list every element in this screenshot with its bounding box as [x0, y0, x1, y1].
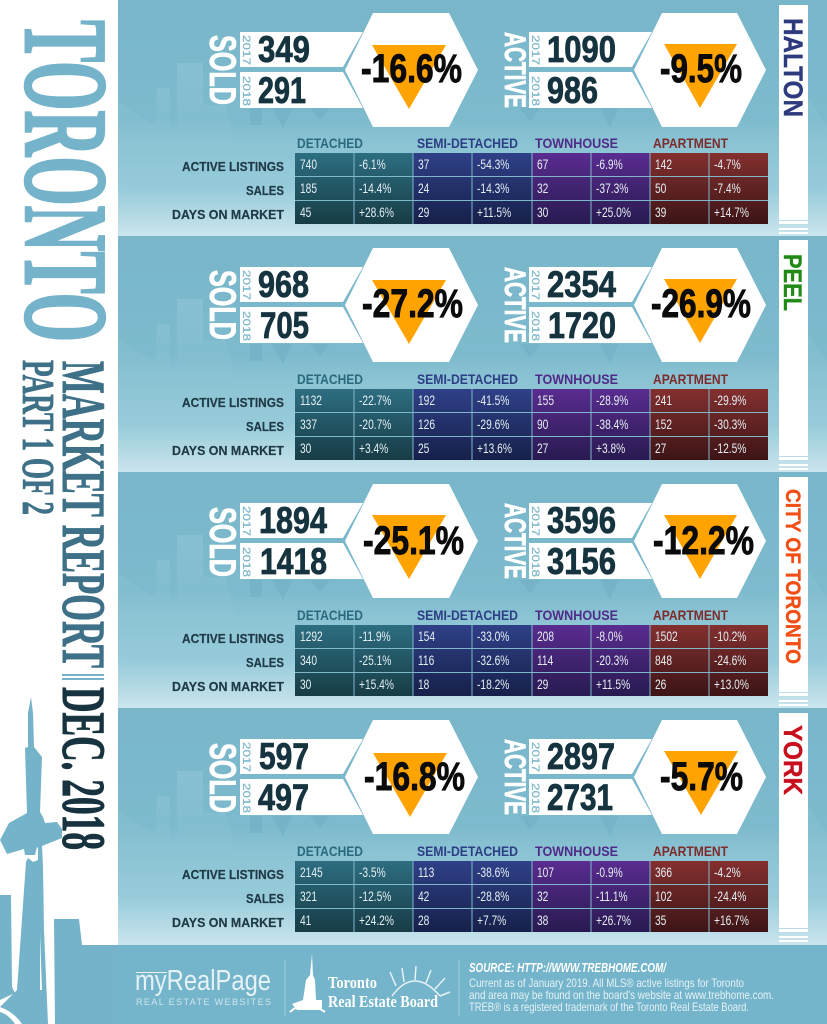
data table: +16.7%: [714, 912, 749, 928]
data table: -18.2%: [477, 676, 509, 692]
table headers: TOWNHOUSE: [535, 135, 618, 151]
data table: [295, 625, 768, 696]
data table: -29.9%: [714, 392, 746, 408]
table headers: [297, 135, 728, 151]
sold years: 2017: [240, 270, 252, 300]
data table: 152: [655, 416, 672, 432]
data table: -7.4%: [714, 180, 741, 196]
row labels: ACTIVE LISTINGS: [182, 159, 284, 174]
data table: +28.6%: [359, 204, 394, 220]
table headers: DETACHED: [297, 607, 363, 623]
data table: -0.9%: [596, 864, 623, 880]
data table: -4.2%: [714, 864, 741, 880]
data table: +24.2%: [359, 912, 394, 928]
data table: 28: [418, 912, 430, 928]
data table: 32: [537, 888, 549, 904]
table headers: DETACHED: [297, 135, 363, 151]
data table: +11.5%: [596, 676, 630, 692]
table headers: TOWNHOUSE: [535, 607, 618, 623]
data table: -37.3%: [596, 180, 628, 196]
active numbers: [547, 736, 615, 818]
skyline with CN Tower: [0, 697, 118, 1024]
region name: HALTON: [778, 18, 808, 117]
data table: -6.9%: [596, 156, 623, 172]
data table: +25.0%: [596, 204, 631, 220]
active years: 2018: [529, 311, 541, 341]
active numbers: [547, 29, 616, 111]
region tab: [779, 477, 808, 706]
table headers: TOWNHOUSE: [535, 843, 618, 859]
active bars: [529, 267, 652, 343]
data table: +14.7%: [714, 204, 749, 220]
sold years: [240, 742, 252, 813]
data table: 29: [537, 676, 549, 692]
data table: -10.2%: [714, 628, 746, 644]
active years: 2018: [529, 783, 541, 813]
sold years: 2017: [240, 35, 252, 65]
data table: 26: [655, 676, 667, 692]
data table: +7.7%: [477, 912, 506, 928]
sold change: -16.8%: [364, 755, 465, 799]
active bars: [529, 32, 652, 108]
data table: +13.6%: [477, 440, 512, 456]
sold numbers: [258, 264, 309, 346]
active years: 2017: [529, 35, 541, 65]
data table: -24.4%: [714, 888, 746, 904]
data table: 366: [655, 864, 672, 880]
active hexagon: [634, 248, 766, 362]
data table: -28.9%: [596, 392, 628, 408]
sold numbers: 1418: [260, 541, 327, 582]
table headers: [297, 371, 728, 387]
data table: 340: [300, 652, 317, 668]
source text: [469, 960, 774, 1014]
active numbers: 1720: [548, 305, 616, 346]
table headers: SEMI-DETACHED: [417, 607, 518, 623]
logo: myRealPage: [135, 965, 271, 1007]
footer panel: [118, 945, 827, 1024]
data table: 208: [537, 628, 554, 644]
data table: -11.9%: [359, 628, 391, 644]
data table: -25.1%: [359, 652, 391, 668]
active numbers: [547, 264, 616, 346]
row labels: [172, 395, 284, 458]
panel: Halton: [118, 0, 827, 236]
sold numbers: 705: [260, 305, 309, 346]
logo: Toronto Real Estate Board: [290, 954, 450, 1012]
active change: -26.9%: [651, 282, 751, 326]
panel: York: [118, 708, 827, 945]
active numbers: [547, 500, 616, 582]
data table: 37: [418, 156, 430, 172]
table headers: TOWNHOUSE: [535, 371, 618, 387]
active years: [529, 742, 541, 813]
source text: Current as of January 2019. All MLS® active listings for Toronto: [469, 976, 744, 990]
table headers: APARTMENT: [653, 843, 728, 859]
data table: +3.8%: [596, 440, 625, 456]
logo: Toronto Real Estate Board: Toronto: [328, 973, 377, 992]
data table: 116: [418, 652, 434, 668]
active years: [529, 270, 541, 341]
data table: +26.7%: [596, 912, 631, 928]
down triangle: [372, 45, 446, 109]
table headers: SEMI-DETACHED: [417, 135, 518, 151]
data table: -38.4%: [596, 416, 628, 432]
region name: PEEL: [778, 254, 806, 311]
active hexagon: [634, 13, 766, 127]
table headers: DETACHED: [297, 371, 363, 387]
date: Dec. 2018: DEC. 2018: [49, 687, 116, 850]
title: Toronto: TORONTO: [0, 20, 132, 342]
data table: 30: [537, 204, 549, 220]
data table: 241: [655, 392, 672, 408]
data table: 1502: [655, 628, 678, 644]
sold hexagon: [345, 484, 478, 598]
region tab: [779, 5, 808, 234]
data table: 50: [655, 180, 667, 196]
active numbers: 3156: [547, 541, 616, 582]
sold change: -16.6%: [361, 47, 462, 91]
data table: 126: [418, 416, 435, 432]
sold numbers: 597: [259, 736, 309, 777]
data table: +3.4%: [359, 440, 388, 456]
data table: -4.7%: [714, 156, 741, 172]
active bars: [529, 739, 652, 815]
data table: -3.5%: [359, 864, 386, 880]
active years: 2018: [529, 76, 541, 106]
row labels: SALES: [246, 891, 284, 906]
sold years: 2018: [240, 311, 252, 341]
data table: -32.6%: [477, 652, 509, 668]
data table: -24.6%: [714, 652, 746, 668]
active numbers: 986: [547, 70, 598, 111]
source text: TREB® is a registered trademark of the Toronto Real Estate Board.: [469, 1000, 749, 1014]
table headers: APARTMENT: [653, 607, 728, 623]
table headers: SEMI-DETACHED: [417, 843, 518, 859]
down triangle: [664, 279, 737, 343]
data table: -33.0%: [477, 628, 509, 644]
data table: 42: [418, 888, 430, 904]
sold change: -27.2%: [362, 282, 463, 326]
data table: [295, 861, 768, 932]
sold label: SOLD: [202, 743, 243, 813]
active numbers: 2354: [547, 264, 616, 305]
sold hexagon: [345, 720, 478, 834]
data table: 740: [300, 156, 317, 172]
table headers: APARTMENT: [653, 135, 728, 151]
sold numbers: 291: [258, 70, 306, 111]
data table: -20.7%: [359, 416, 391, 432]
data table: -6.1%: [359, 156, 386, 172]
down triangle: [664, 751, 738, 815]
row labels: [172, 631, 284, 694]
data table: 154: [418, 628, 435, 644]
active label: ACTIVE: [498, 32, 531, 108]
sold bars: [240, 32, 363, 108]
row labels: [172, 159, 284, 222]
source text: SOURCE: HTTP://WWW.TREBHOME.COM/: [469, 960, 667, 975]
row labels: ACTIVE LISTINGS: [182, 395, 284, 410]
data table: 102: [655, 888, 672, 904]
active hexagon: [634, 720, 766, 834]
data table: 113: [418, 864, 434, 880]
data table: 29: [418, 204, 430, 220]
down triangle: [664, 44, 737, 108]
data table: 27: [537, 440, 549, 456]
sold numbers: 1894: [259, 500, 327, 541]
data table: 185: [300, 180, 317, 196]
row labels: SALES: [246, 655, 284, 670]
title separator: [62, 674, 104, 680]
down triangle: [372, 515, 446, 579]
data table: 192: [418, 392, 435, 408]
down triangle: [372, 280, 446, 344]
region tab: [779, 240, 808, 470]
data table: 155: [537, 392, 554, 408]
data table: -28.8%: [477, 888, 509, 904]
table headers: [297, 843, 728, 859]
logo: Toronto Real Estate Board: Real Estate Board: [328, 992, 438, 1011]
active years: 2018: [529, 547, 541, 577]
data table: -12.5%: [714, 440, 746, 456]
sold label: SOLD: [202, 507, 243, 577]
active years: 2017: [529, 270, 541, 300]
table headers: DETACHED: [297, 843, 363, 859]
active years: 2017: [529, 506, 541, 536]
active years: [529, 35, 541, 106]
data table: -22.7%: [359, 392, 391, 408]
row labels: [172, 867, 284, 930]
data table: 27: [655, 440, 667, 456]
row labels: DAYS ON MARKET: [172, 679, 284, 694]
data table: -41.5%: [477, 392, 509, 408]
active label: ACTIVE: [498, 739, 531, 815]
data table: 107: [537, 864, 554, 880]
data table: 337: [300, 416, 317, 432]
logo: myRealPage: REAL ESTATE WEBSITES: [136, 997, 271, 1007]
data table: 41: [300, 912, 312, 928]
data table: 321: [300, 888, 317, 904]
row labels: SALES: [246, 419, 284, 434]
active years: 2017: [529, 742, 541, 772]
active numbers: 2731: [547, 777, 613, 818]
row labels: DAYS ON MARKET: [172, 915, 284, 930]
sold label: SOLD: [202, 35, 243, 105]
active numbers: 2897: [547, 736, 615, 777]
row labels: ACTIVE LISTINGS: [182, 631, 284, 646]
data table: 30: [300, 440, 312, 456]
sold bars: [240, 739, 363, 815]
active label: ACTIVE: [498, 267, 531, 343]
data table: 18: [418, 676, 430, 692]
data table: 142: [655, 156, 672, 172]
sold years: 2017: [240, 742, 252, 772]
down triangle: [664, 515, 737, 579]
region tab: [779, 713, 808, 942]
active change: -5.7%: [660, 755, 743, 799]
data table: 1292: [300, 628, 323, 644]
sold numbers: [259, 500, 327, 582]
data table: [295, 153, 768, 224]
data table: 2145: [300, 864, 323, 880]
data table: 38: [537, 912, 549, 928]
sold numbers: 497: [258, 777, 309, 818]
data table: -8.0%: [596, 628, 623, 644]
table headers: [297, 607, 728, 623]
region name: YORK: [778, 725, 808, 795]
data table: 45: [300, 204, 312, 220]
active hexagon: [634, 484, 766, 598]
active bars: [529, 503, 652, 579]
data table: +11.5%: [477, 204, 511, 220]
data table: -30.3%: [714, 416, 746, 432]
logo: myRealPage: myRealPage: [135, 965, 271, 997]
row labels: DAYS ON MARKET: [172, 443, 284, 458]
active numbers: 1090: [547, 29, 616, 70]
down triangle: [373, 753, 447, 817]
active label: ACTIVE: [498, 503, 531, 579]
sold years: [240, 270, 252, 341]
table headers: SEMI-DETACHED: [417, 371, 518, 387]
data table: 30: [300, 676, 312, 692]
sold bars: [240, 503, 363, 579]
sold hexagon: [345, 248, 478, 362]
data table: [295, 389, 768, 460]
table headers: APARTMENT: [653, 371, 728, 387]
data table: 67: [537, 156, 549, 172]
active change: -9.5%: [660, 47, 742, 91]
sold numbers: 968: [258, 264, 309, 305]
row labels: SALES: [246, 183, 284, 198]
panel: City of Toronto: [118, 472, 827, 708]
sold years: [240, 35, 252, 106]
data table: 24: [418, 180, 430, 196]
data table: 39: [655, 204, 667, 220]
data table: +15.4%: [359, 676, 394, 692]
sold change: -25.1%: [363, 519, 464, 563]
data table: -54.3%: [477, 156, 509, 172]
data table: 32: [537, 180, 549, 196]
data table: -29.6%: [477, 416, 509, 432]
row labels: DAYS ON MARKET: [172, 207, 284, 222]
data table: 25: [418, 440, 430, 456]
data table: -11.1%: [596, 888, 628, 904]
sold hexagon: [345, 13, 478, 127]
subtitle: Market Report: MARKET REPORT: [49, 361, 116, 668]
data table: 1132: [300, 392, 322, 408]
sold years: 2018: [240, 76, 252, 106]
sold numbers: [258, 736, 309, 818]
sold years: [240, 506, 252, 577]
data table: 114: [537, 652, 553, 668]
region name: CITY OF TORONTO: [781, 489, 804, 664]
data table: 848: [655, 652, 672, 668]
active change: -12.2%: [653, 519, 754, 563]
data table: -12.5%: [359, 888, 391, 904]
row labels: ACTIVE LISTINGS: [182, 867, 284, 882]
active years: [529, 506, 541, 577]
data table: 35: [655, 912, 667, 928]
active numbers: 3596: [547, 500, 616, 541]
sold label: SOLD: [202, 270, 243, 340]
sold numbers: [258, 29, 310, 111]
sold bars: [240, 267, 363, 343]
subtitle: Part 1 of 2: PART 1 OF 2: [13, 360, 64, 515]
sold years: 2018: [240, 783, 252, 813]
data table: -20.3%: [596, 652, 628, 668]
panel: Peel: [118, 236, 827, 472]
data table: 90: [537, 416, 549, 432]
data table: +13.0%: [714, 676, 749, 692]
sold numbers: 349: [258, 29, 310, 70]
data table: -14.3%: [477, 180, 509, 196]
data table: -14.4%: [359, 180, 391, 196]
sold years: 2017: [240, 506, 252, 536]
data table: -38.6%: [477, 864, 509, 880]
sold years: 2018: [240, 547, 252, 577]
